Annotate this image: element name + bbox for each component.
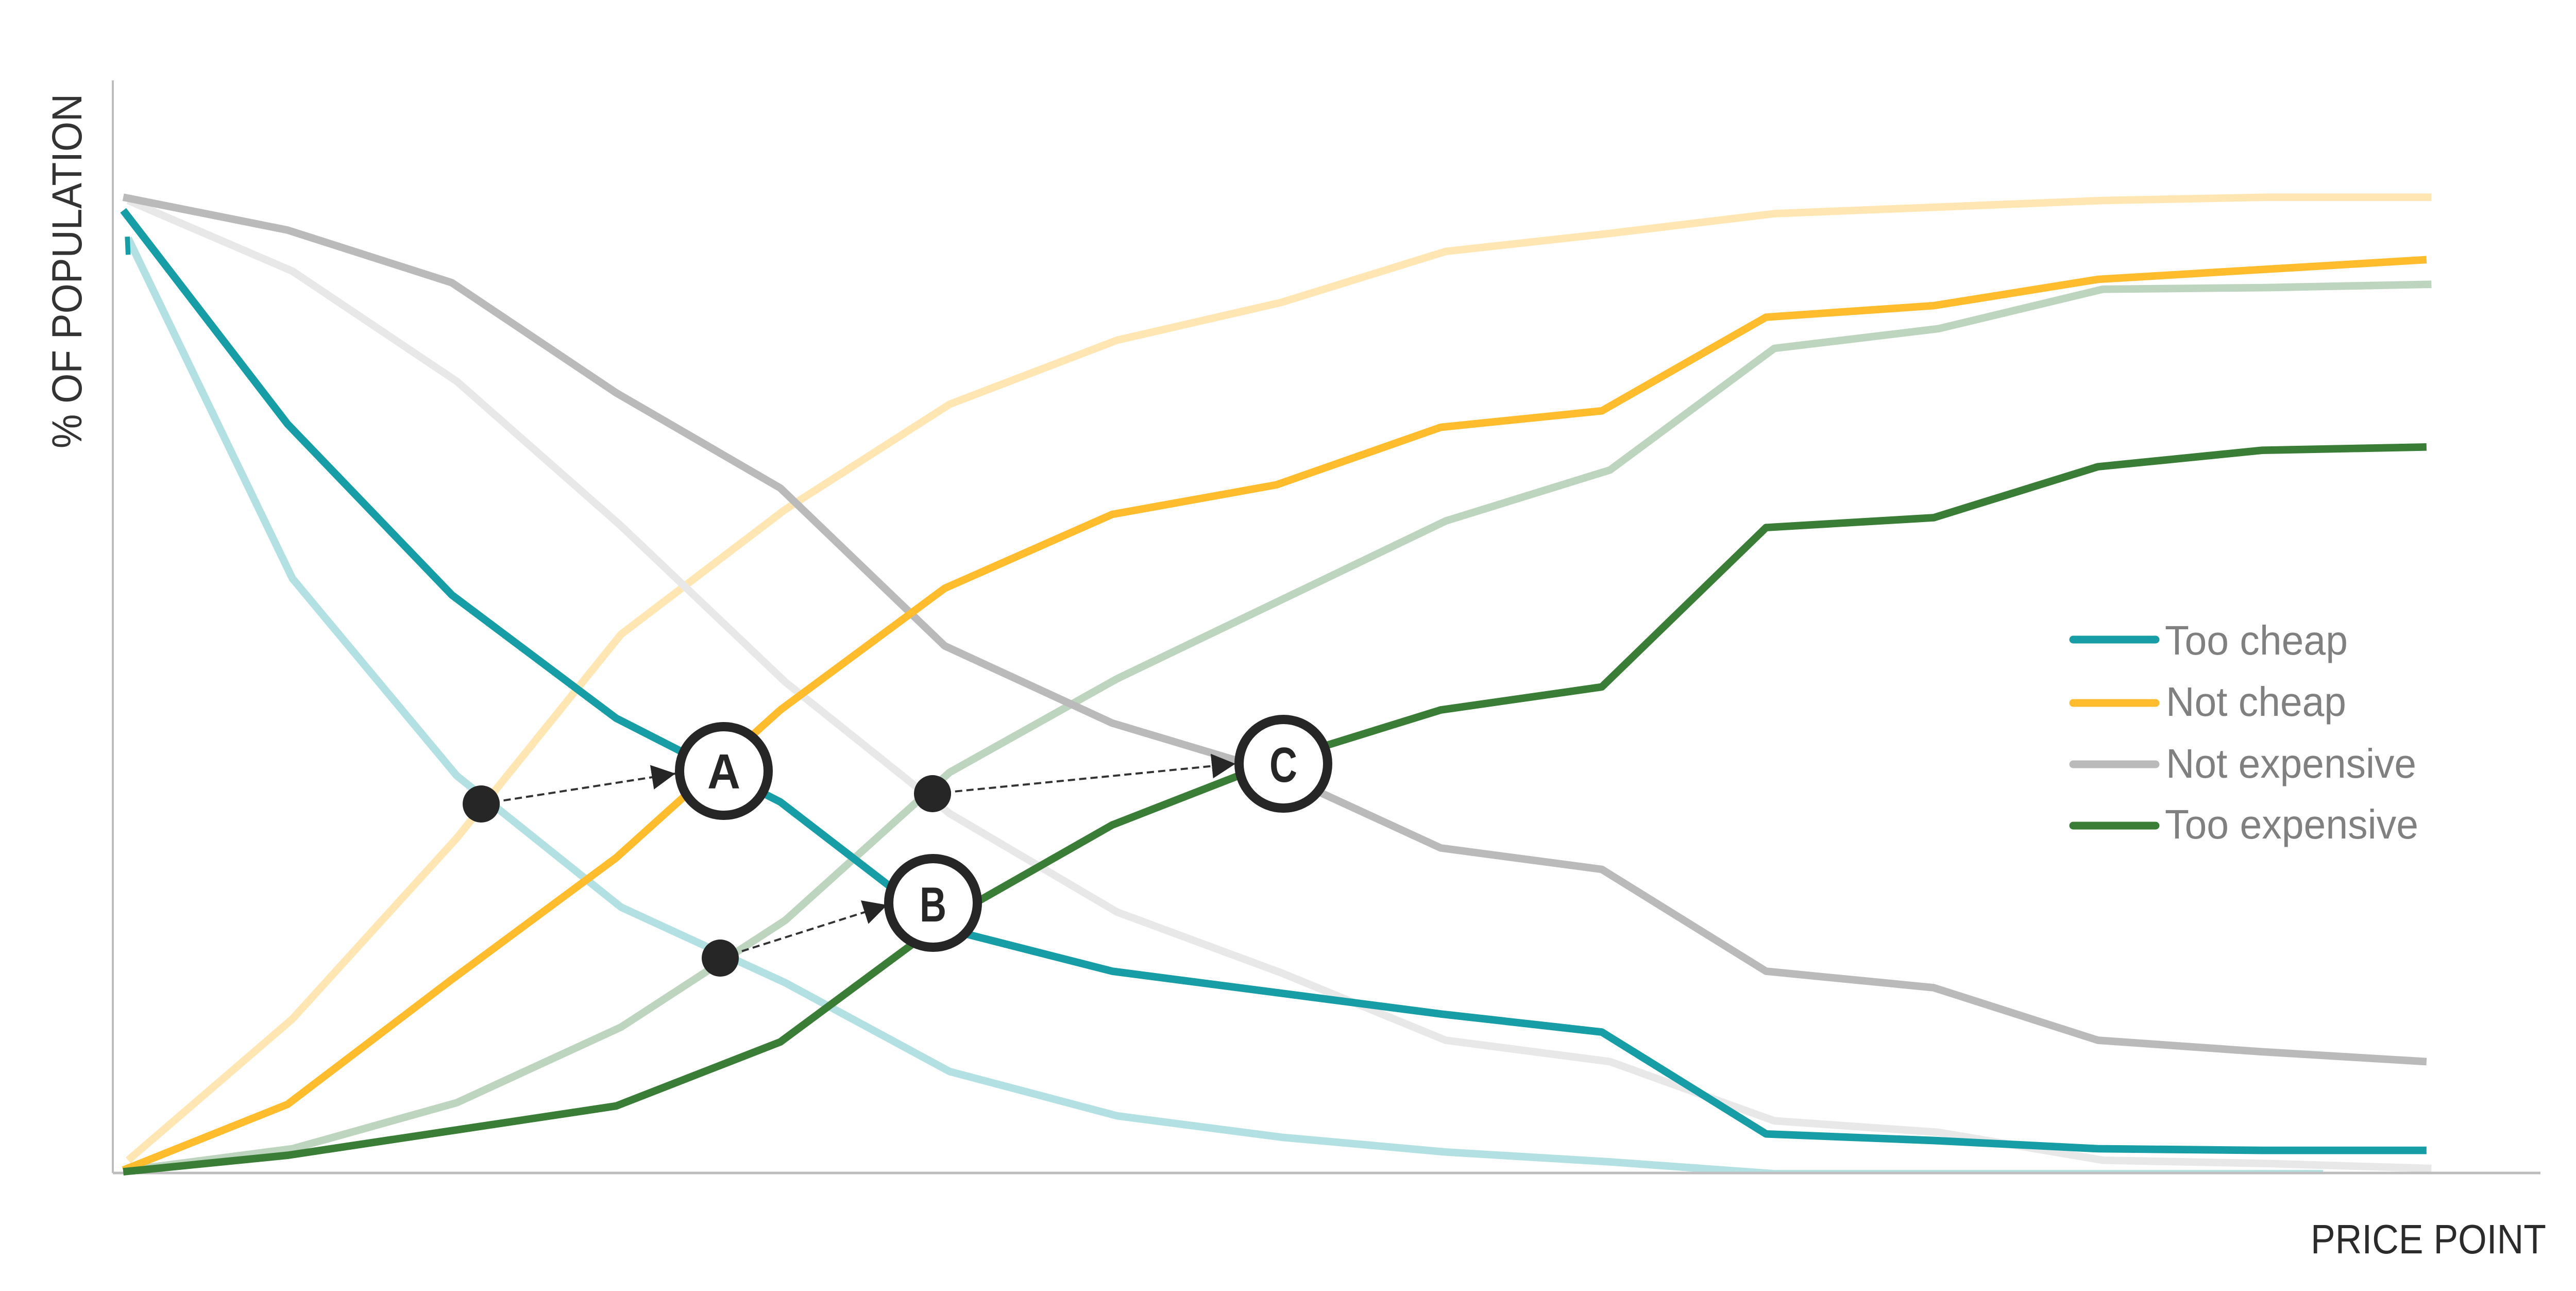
legend item: not cheap: Not cheap (2166, 679, 2346, 725)
marker C: C (1269, 737, 1297, 793)
light curve: not expensive (128, 200, 2431, 1168)
light curve: too expensive (128, 284, 2431, 1170)
legend item: too expensive: Too expensive (2165, 801, 2418, 847)
x axis title: PRICE POINT (2311, 1216, 2546, 1262)
start fragment of light too cheap curve (127, 237, 128, 255)
arrow: dot to C (914, 764, 1235, 812)
legend item: too cheap: Too cheap (2165, 617, 2348, 663)
marker A: A (707, 744, 740, 799)
curve: not cheap (123, 260, 2427, 1170)
arrow: dot to A (463, 774, 675, 823)
light curve: not cheap (128, 197, 2431, 1160)
curve: too expensive (123, 447, 2427, 1172)
curve: not expensive (123, 197, 2427, 1062)
light curves: comparison data (127, 197, 2431, 1173)
y axis title: % OF POPULATION (44, 94, 91, 448)
arrow: dot to B (702, 905, 887, 977)
marker B: B (920, 877, 946, 932)
curve: too cheap (123, 210, 2427, 1150)
y axis line (112, 80, 114, 1173)
marker C (1239, 719, 1328, 808)
legend item: not expensive: Not expensive (2166, 741, 2416, 786)
marker A (680, 727, 768, 815)
main curves (123, 197, 2427, 1172)
light curve: too cheap (128, 238, 2323, 1173)
x axis line (113, 1172, 2540, 1174)
legend (2073, 617, 2418, 847)
marker B (889, 859, 977, 947)
